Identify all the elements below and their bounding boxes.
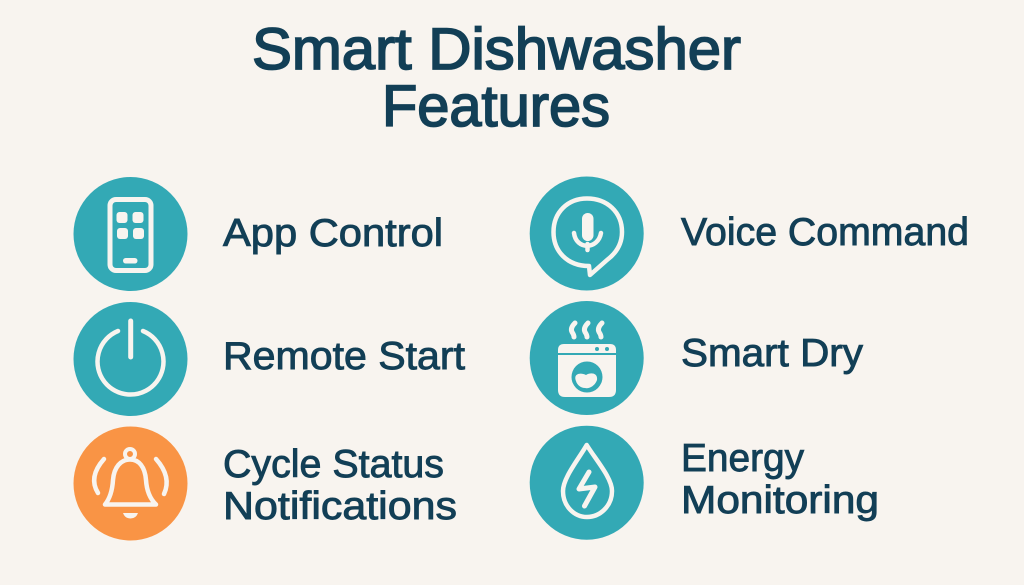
icon: smartphone	[74, 177, 188, 291]
feature: Remote Start	[74, 302, 465, 416]
feature: Cycle Status Notifications	[74, 426, 457, 540]
label: Smart Dry: Smart Dry	[681, 332, 864, 375]
label: Cycle Status Notifications: Notifications	[223, 485, 457, 528]
title	[252, 17, 741, 139]
label: Remote Start: Remote Start	[223, 335, 465, 378]
feature: Energy Monitoring	[530, 426, 879, 540]
title: Smart Dishwasher	[252, 17, 741, 82]
icon: microphone speech bubble	[530, 176, 644, 290]
feature: Smart Dry	[530, 301, 864, 415]
icon: power button	[74, 302, 188, 416]
label: Energy Monitoring: Energy	[681, 437, 804, 480]
icon: washer with steam	[530, 301, 644, 415]
label: Voice Command: Voice Command	[681, 211, 969, 254]
icon: bell	[74, 426, 188, 540]
label: Energy Monitoring	[681, 437, 879, 522]
label: Cycle Status Notifications: Cycle Status	[223, 443, 444, 486]
feature: Voice Command	[530, 176, 969, 290]
label: Energy Monitoring: Monitoring	[681, 479, 879, 522]
label: Cycle Status Notifications	[223, 443, 457, 528]
title: Features	[382, 74, 610, 139]
icon: water drop with lightning bolt	[530, 426, 644, 540]
label: App Control: App Control	[223, 212, 443, 255]
feature: App Control	[74, 177, 443, 291]
